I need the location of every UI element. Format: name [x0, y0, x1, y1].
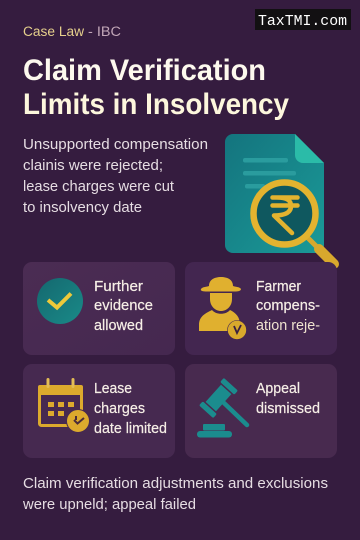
- card text: Farmer: [256, 279, 301, 295]
- panel: appeal dismissed: [185, 364, 337, 458]
- card text: [256, 279, 320, 334]
- footer conclusion: Claim verification adjustments and exclusions: [23, 475, 328, 492]
- summary text: to insolvency date: [23, 199, 142, 216]
- card text: [94, 279, 153, 334]
- card text: date limited: [94, 421, 167, 437]
- title: [23, 54, 290, 121]
- card text: Lease: [94, 381, 132, 397]
- card text: allowed: [94, 318, 143, 334]
- summary text: lease charges were cut: [23, 178, 175, 195]
- card text: charges: [94, 401, 145, 417]
- icon: gavel: [197, 378, 247, 438]
- summary text: [23, 136, 208, 216]
- card text: Appeal: [256, 381, 300, 397]
- icon: document with rupee magnifier: [225, 134, 334, 264]
- panel: farmer compensation rejected: [185, 262, 337, 355]
- panel: further evidence allowed: [23, 262, 175, 355]
- panel: lease charges date limited: [23, 364, 175, 458]
- card text: Further: [94, 279, 143, 295]
- title: Claim Verification: [23, 54, 266, 87]
- icon: check circle: [37, 278, 83, 324]
- card text: ation reje-: [256, 318, 320, 334]
- card text: [256, 381, 320, 417]
- card text: [94, 381, 167, 437]
- footer conclusion: [22, 475, 328, 513]
- category label: Case Law: [23, 24, 84, 39]
- title: Limits in Insolvency: [23, 88, 290, 121]
- footer conclusion: were upneld; appeal failed: [22, 496, 196, 513]
- summary text: clainis were rejected;: [23, 157, 163, 174]
- icon: farmer: [199, 277, 246, 340]
- category label: [23, 24, 121, 39]
- badge: TaxTMI.com: TaxTMI.com: [258, 13, 347, 30]
- icon: calendar with clock: [38, 378, 90, 432]
- summary text: Unsupported compensation: [23, 136, 208, 153]
- category label: - IBC: [88, 24, 121, 39]
- card text: evidence: [94, 298, 153, 314]
- card text: compens-: [256, 298, 320, 314]
- card text: dismissed: [256, 401, 320, 417]
